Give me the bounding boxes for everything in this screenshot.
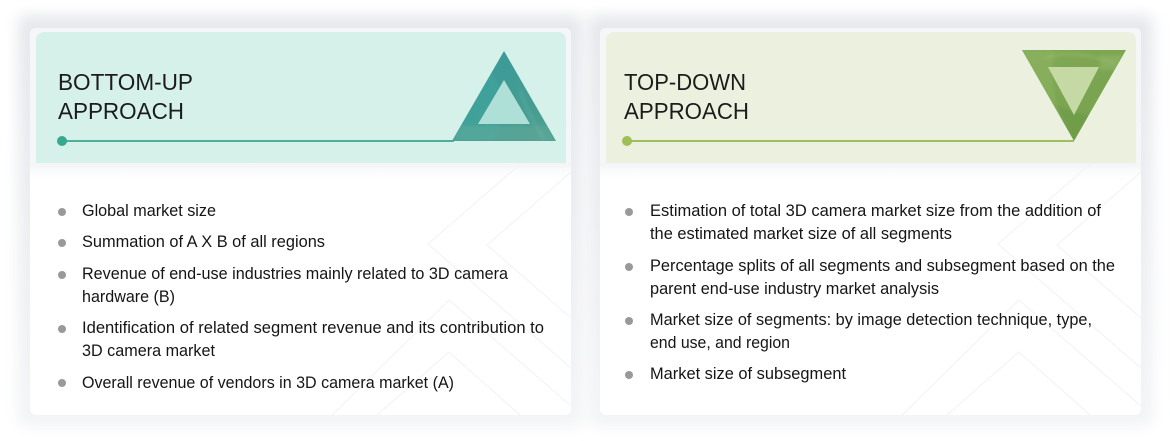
bullet item: market size of segments: end use, and region	[650, 334, 790, 352]
icon: downward triangle	[1022, 50, 1126, 141]
header band: top-down	[606, 32, 1136, 163]
heading: top-down approach: TOP-DOWN	[624, 69, 746, 95]
heading: bottom-up approach: APPROACH	[58, 98, 184, 124]
icon: upward triangle	[452, 51, 556, 141]
heading: top-down approach	[624, 69, 749, 124]
heading: top-down approach: APPROACH	[624, 98, 749, 124]
heading: bottom-up approach	[58, 69, 193, 124]
bullet item: market size of subsegment: Market size of subsegment	[650, 365, 846, 383]
panel: bottom-up approach	[18, 15, 583, 430]
bullet item: estimation of total market size	[625, 202, 1101, 243]
bullet item: market size of segments	[625, 311, 1092, 352]
bullet item: summation: Summation of A X B of all regions	[82, 233, 325, 251]
bullet item: revenue of end-use industries	[58, 265, 509, 306]
bullet item: percentage splits: parent end-use industry market analysis	[650, 280, 939, 298]
header band: bottom-up	[36, 32, 566, 163]
bullet item: identification of segment revenue: 3D camera market	[82, 342, 215, 360]
bullet item: identification of segment revenue: Identification of related segment revenue and its contribution to	[82, 319, 544, 337]
bullet item: percentage splits: Percentage splits of all segments and subsegment based on the	[650, 257, 1115, 275]
bullet item: estimation of total market size: Estimation of total 3D camera market size from the addition of	[650, 202, 1101, 220]
bullet item: identification of segment revenue	[58, 319, 544, 360]
bullet item: estimation of total market size: the estimated market size of all segments	[650, 225, 952, 243]
bullet item: global market size: Global market size	[82, 202, 216, 220]
heading: bottom-up approach: BOTTOM-UP	[58, 69, 193, 95]
timeline line with dot	[622, 136, 1074, 146]
bullet list: top-down	[625, 202, 1115, 383]
bullet item: percentage splits	[625, 257, 1115, 298]
bullet list: bottom-up	[58, 202, 544, 392]
timeline line with dot	[57, 136, 454, 146]
bullet item: market size of segments: Market size of segments: by image detection technique, type,	[650, 311, 1092, 329]
bullet item: revenue of end-use industries: Revenue of end-use industries mainly related to 3D camera	[82, 265, 509, 283]
bullet item: overall revenue of vendors: Overall revenue of vendors in 3D camera market (A)	[82, 374, 454, 392]
panel: top-down approach	[588, 15, 1153, 430]
bullet item: revenue of end-use industries: hardware (B)	[82, 288, 175, 306]
